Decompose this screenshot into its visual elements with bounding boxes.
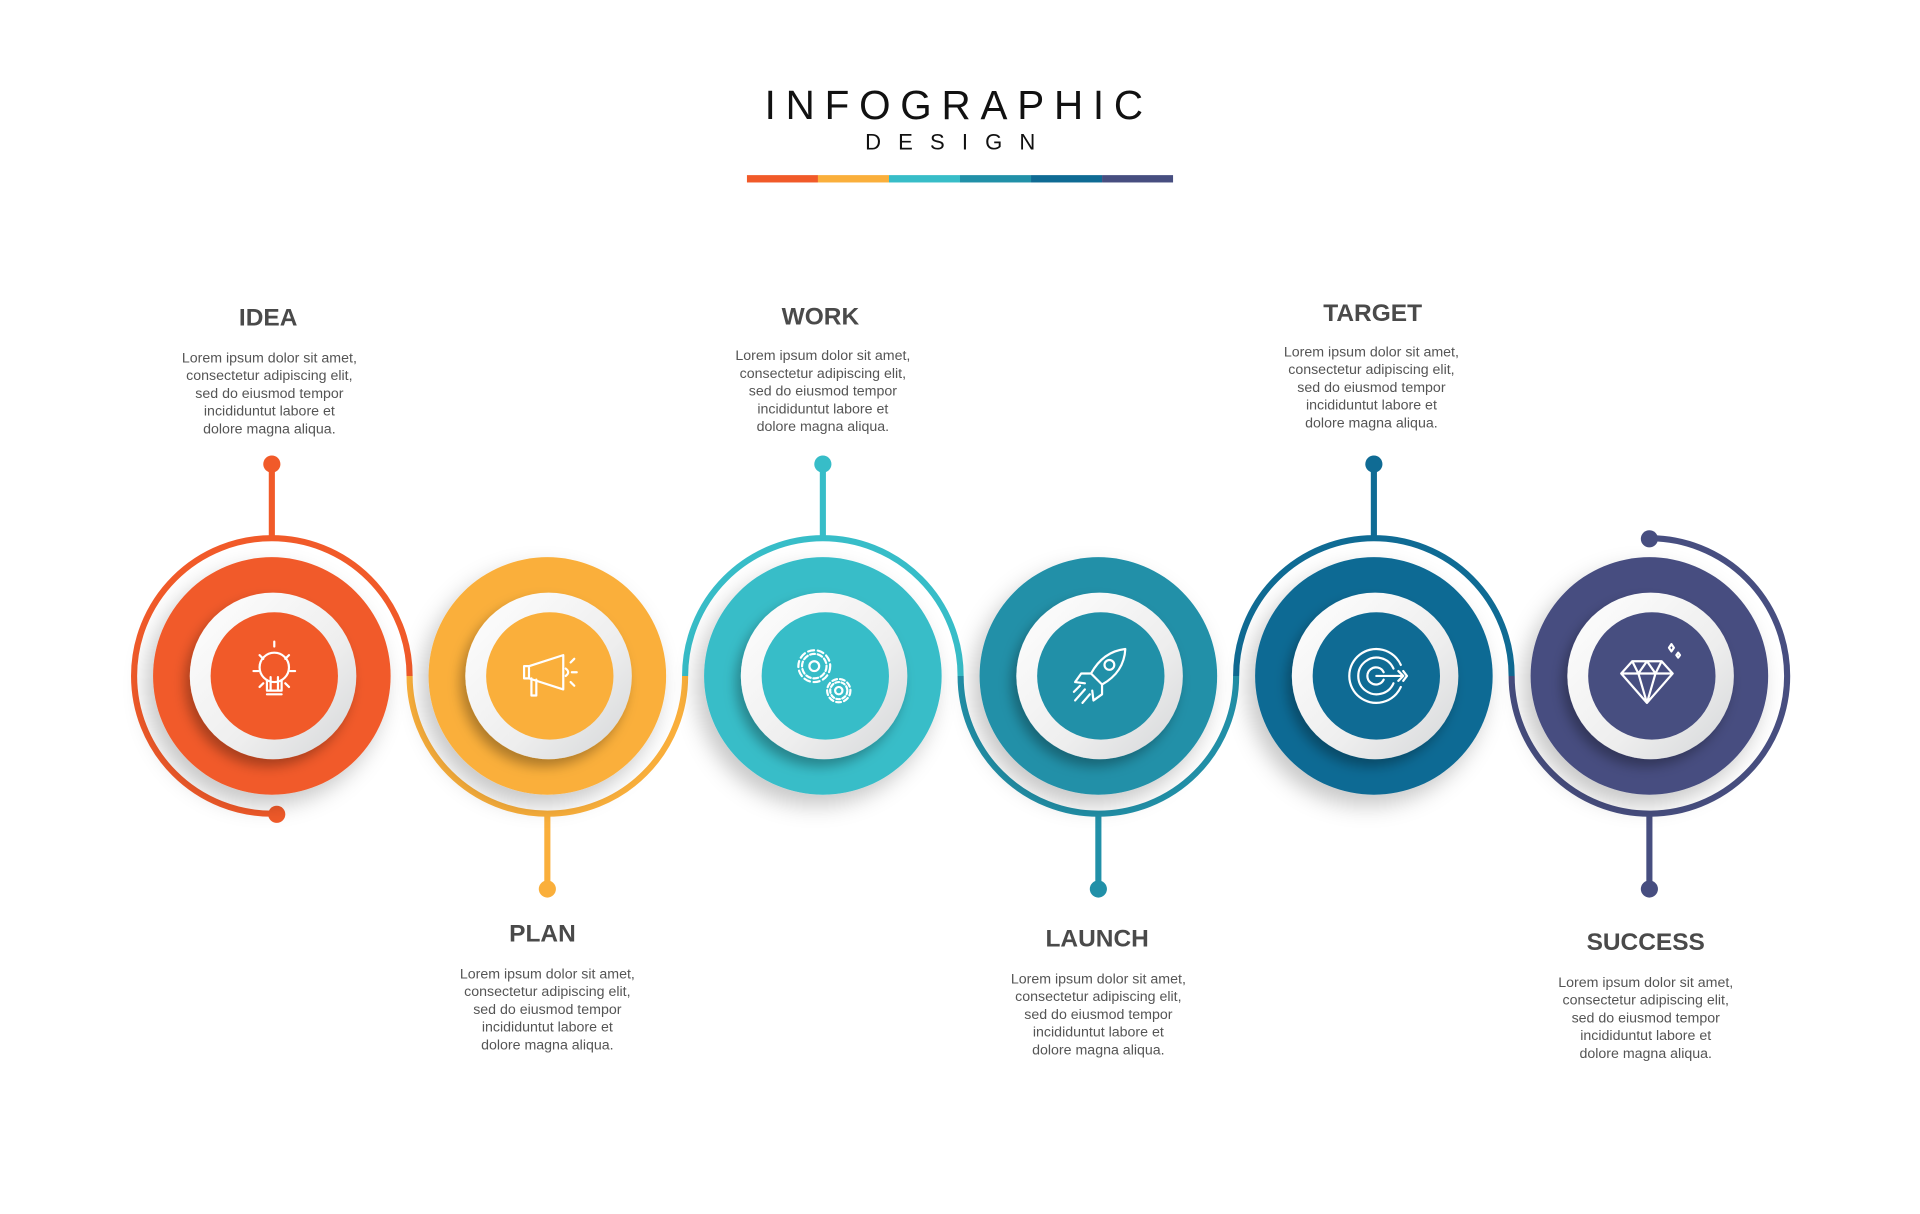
text: TARGET [1284, 300, 1459, 431]
icon: light bulb [253, 642, 295, 694]
text: LAUNCH: Lorem ipsum dolor sit amet, [1011, 971, 1186, 987]
icon: target [1349, 649, 1407, 703]
text: PLAN: dolore magna aliqua. [481, 1037, 614, 1053]
color bar [747, 175, 1173, 182]
icon: gears [798, 650, 850, 702]
text: IDEA: incididuntut labore et [204, 404, 335, 420]
text: PLAN: sed do eiusmod tempor [473, 1002, 622, 1018]
step: LAUNCH circle [980, 557, 1217, 795]
title: INFOGRAPHIC [765, 82, 1153, 128]
step: TARGET circle [1255, 557, 1493, 795]
text: TARGET: sed do eiusmod tempor [1297, 380, 1446, 396]
text: TARGET: dolore magna aliqua. [1305, 415, 1438, 431]
icon: megaphone [524, 655, 577, 696]
text: TARGET: Lorem ipsum dolor sit amet, [1284, 344, 1459, 360]
text: IDEA: consectetur adipiscing elit, [186, 368, 353, 384]
text: LAUNCH [1011, 926, 1186, 1058]
text: PLAN [460, 921, 635, 1053]
text: WORK [735, 304, 910, 435]
text: TARGET: consectetur adipiscing elit, [1288, 362, 1455, 378]
text: PLAN: PLAN [509, 921, 576, 948]
text: SUCCESS: incididuntut labore et [1580, 1028, 1711, 1044]
step: WORK circle [704, 557, 942, 795]
title: DESIGN [865, 129, 1052, 154]
text: TARGET: TARGET [1323, 300, 1422, 327]
text: LAUNCH: LAUNCH [1045, 926, 1149, 953]
text: TARGET: incididuntut labore et [1306, 398, 1437, 414]
icon: rocket [1074, 649, 1125, 703]
text: WORK: consectetur adipiscing elit, [740, 366, 906, 382]
text: IDEA: dolore magna aliqua. [203, 421, 336, 437]
text: SUCCESS: consectetur adipiscing elit, [1563, 993, 1729, 1009]
text: SUCCESS: dolore magna aliqua. [1579, 1046, 1712, 1062]
text: WORK: dolore magna aliqua. [757, 419, 889, 435]
text: PLAN: consectetur adipiscing elit, [464, 984, 631, 1000]
text: IDEA: sed do eiusmod tempor [195, 386, 344, 402]
step: IDEA circle [153, 557, 391, 795]
text: WORK: Lorem ipsum dolor sit amet, [735, 348, 910, 364]
text: SUCCESS [1558, 929, 1733, 1062]
text: LAUNCH: incididuntut labore et [1033, 1025, 1164, 1041]
text: PLAN: Lorem ipsum dolor sit amet, [460, 966, 635, 982]
text: LAUNCH: dolore magna aliqua. [1032, 1042, 1165, 1058]
text: WORK: incididuntut labore et [757, 401, 888, 417]
text: IDEA: IDEA [239, 305, 298, 332]
connector line [134, 456, 1787, 898]
text: SUCCESS: Lorem ipsum dolor sit amet, [1558, 975, 1733, 991]
step: PLAN circle [429, 557, 666, 795]
text: IDEA [182, 305, 357, 437]
text: SUCCESS: sed do eiusmod tempor [1572, 1010, 1720, 1026]
step: SUCCESS circle [1531, 557, 1768, 795]
text: PLAN: incididuntut labore et [482, 1020, 613, 1036]
text: SUCCESS: SUCCESS [1587, 929, 1705, 956]
icon: diamond [1621, 644, 1680, 703]
title [765, 82, 1153, 154]
text: WORK: sed do eiusmod tempor [749, 384, 897, 400]
text: LAUNCH: consectetur adipiscing elit, [1015, 989, 1182, 1005]
text: LAUNCH: sed do eiusmod tempor [1024, 1007, 1173, 1023]
text: WORK: WORK [782, 304, 859, 331]
text: IDEA: Lorem ipsum dolor sit amet, [182, 350, 357, 366]
